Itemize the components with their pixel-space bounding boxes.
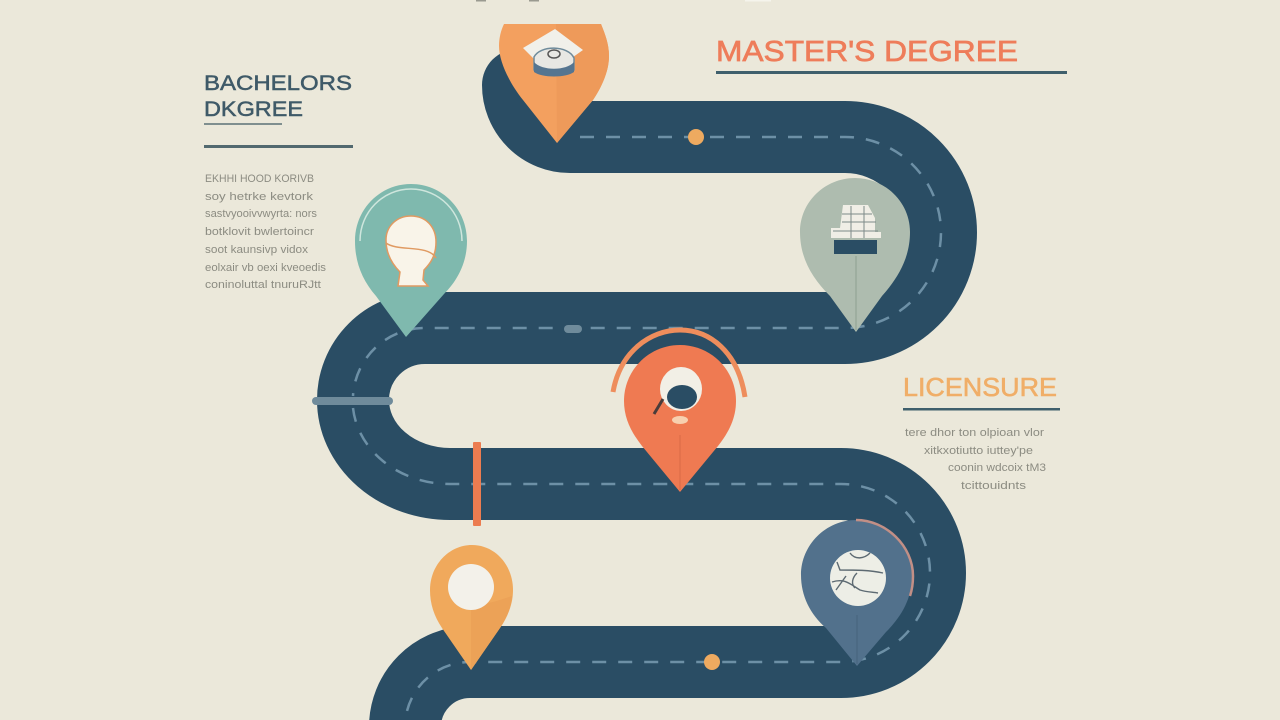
divider: bachelor's heading smudge <box>204 123 282 125</box>
text block: bachelor's description: sastvyooivvwyrta: nors <box>205 208 317 220</box>
icon: person head <box>654 367 702 424</box>
icon: graduation cap <box>523 29 583 76</box>
text block: bachelor's description <box>205 173 327 291</box>
pin: graduation cap <box>499 24 609 143</box>
heading: bachelor's degree <box>204 72 352 121</box>
text block: bachelor's description: soy hetrke kevtork <box>205 191 314 203</box>
divider: master's rule <box>716 71 1067 74</box>
winding road <box>353 85 941 720</box>
text block: bachelor's description: EKHHI HOOD KORIVB <box>205 173 314 185</box>
divider: bachelor's heading rule <box>204 145 353 148</box>
top edge fragments <box>476 0 771 2</box>
road marker: orange bar <box>473 442 481 526</box>
text block: licensure description: tere dhor ton olpioan vlor <box>905 427 1044 439</box>
icon: white circle <box>448 564 494 610</box>
divider: licensure rule <box>903 408 1060 410</box>
road marker: bottom dot <box>704 654 720 670</box>
text block: bachelor's description: coninoluttal tnuruRJtt <box>205 279 321 291</box>
text block: licensure description <box>905 427 1046 492</box>
heading: bachelor's degree: BACHELORS <box>204 72 352 95</box>
text block: licensure description: coonin wdcoix tM3 <box>948 462 1046 474</box>
road marker: left grey band <box>312 397 393 405</box>
text block: bachelor's description: botklovit bwlertoincr <box>205 226 314 238</box>
icon: head silhouette <box>386 216 436 286</box>
text block: bachelor's description: eolxair vb oexi kveoedis <box>205 262 327 274</box>
road marker: top dot <box>688 129 704 145</box>
text block: bachelor's description: soot kaunsivp vidox <box>205 244 309 256</box>
road marker: grey capsule <box>564 325 582 333</box>
icon: building <box>831 205 881 254</box>
text block: licensure description: xitkxotiutto iuttey'pe <box>924 445 1033 457</box>
pin: coral with arc <box>613 330 745 492</box>
arc above coral pin <box>613 330 745 397</box>
pin: teal profile <box>355 184 467 337</box>
heading: licensure: LICENSURE <box>903 372 1057 402</box>
pin: blue globe <box>801 520 913 666</box>
heading: bachelor's degree: DKGREE <box>204 98 303 121</box>
icon: globe <box>830 550 886 606</box>
text block: licensure description: tcittouidnts <box>961 480 1027 492</box>
heading: master's degree: MASTER'S DEGREE <box>716 36 1018 68</box>
pin: yellow circle <box>430 545 513 670</box>
pin: sage building <box>800 178 910 332</box>
